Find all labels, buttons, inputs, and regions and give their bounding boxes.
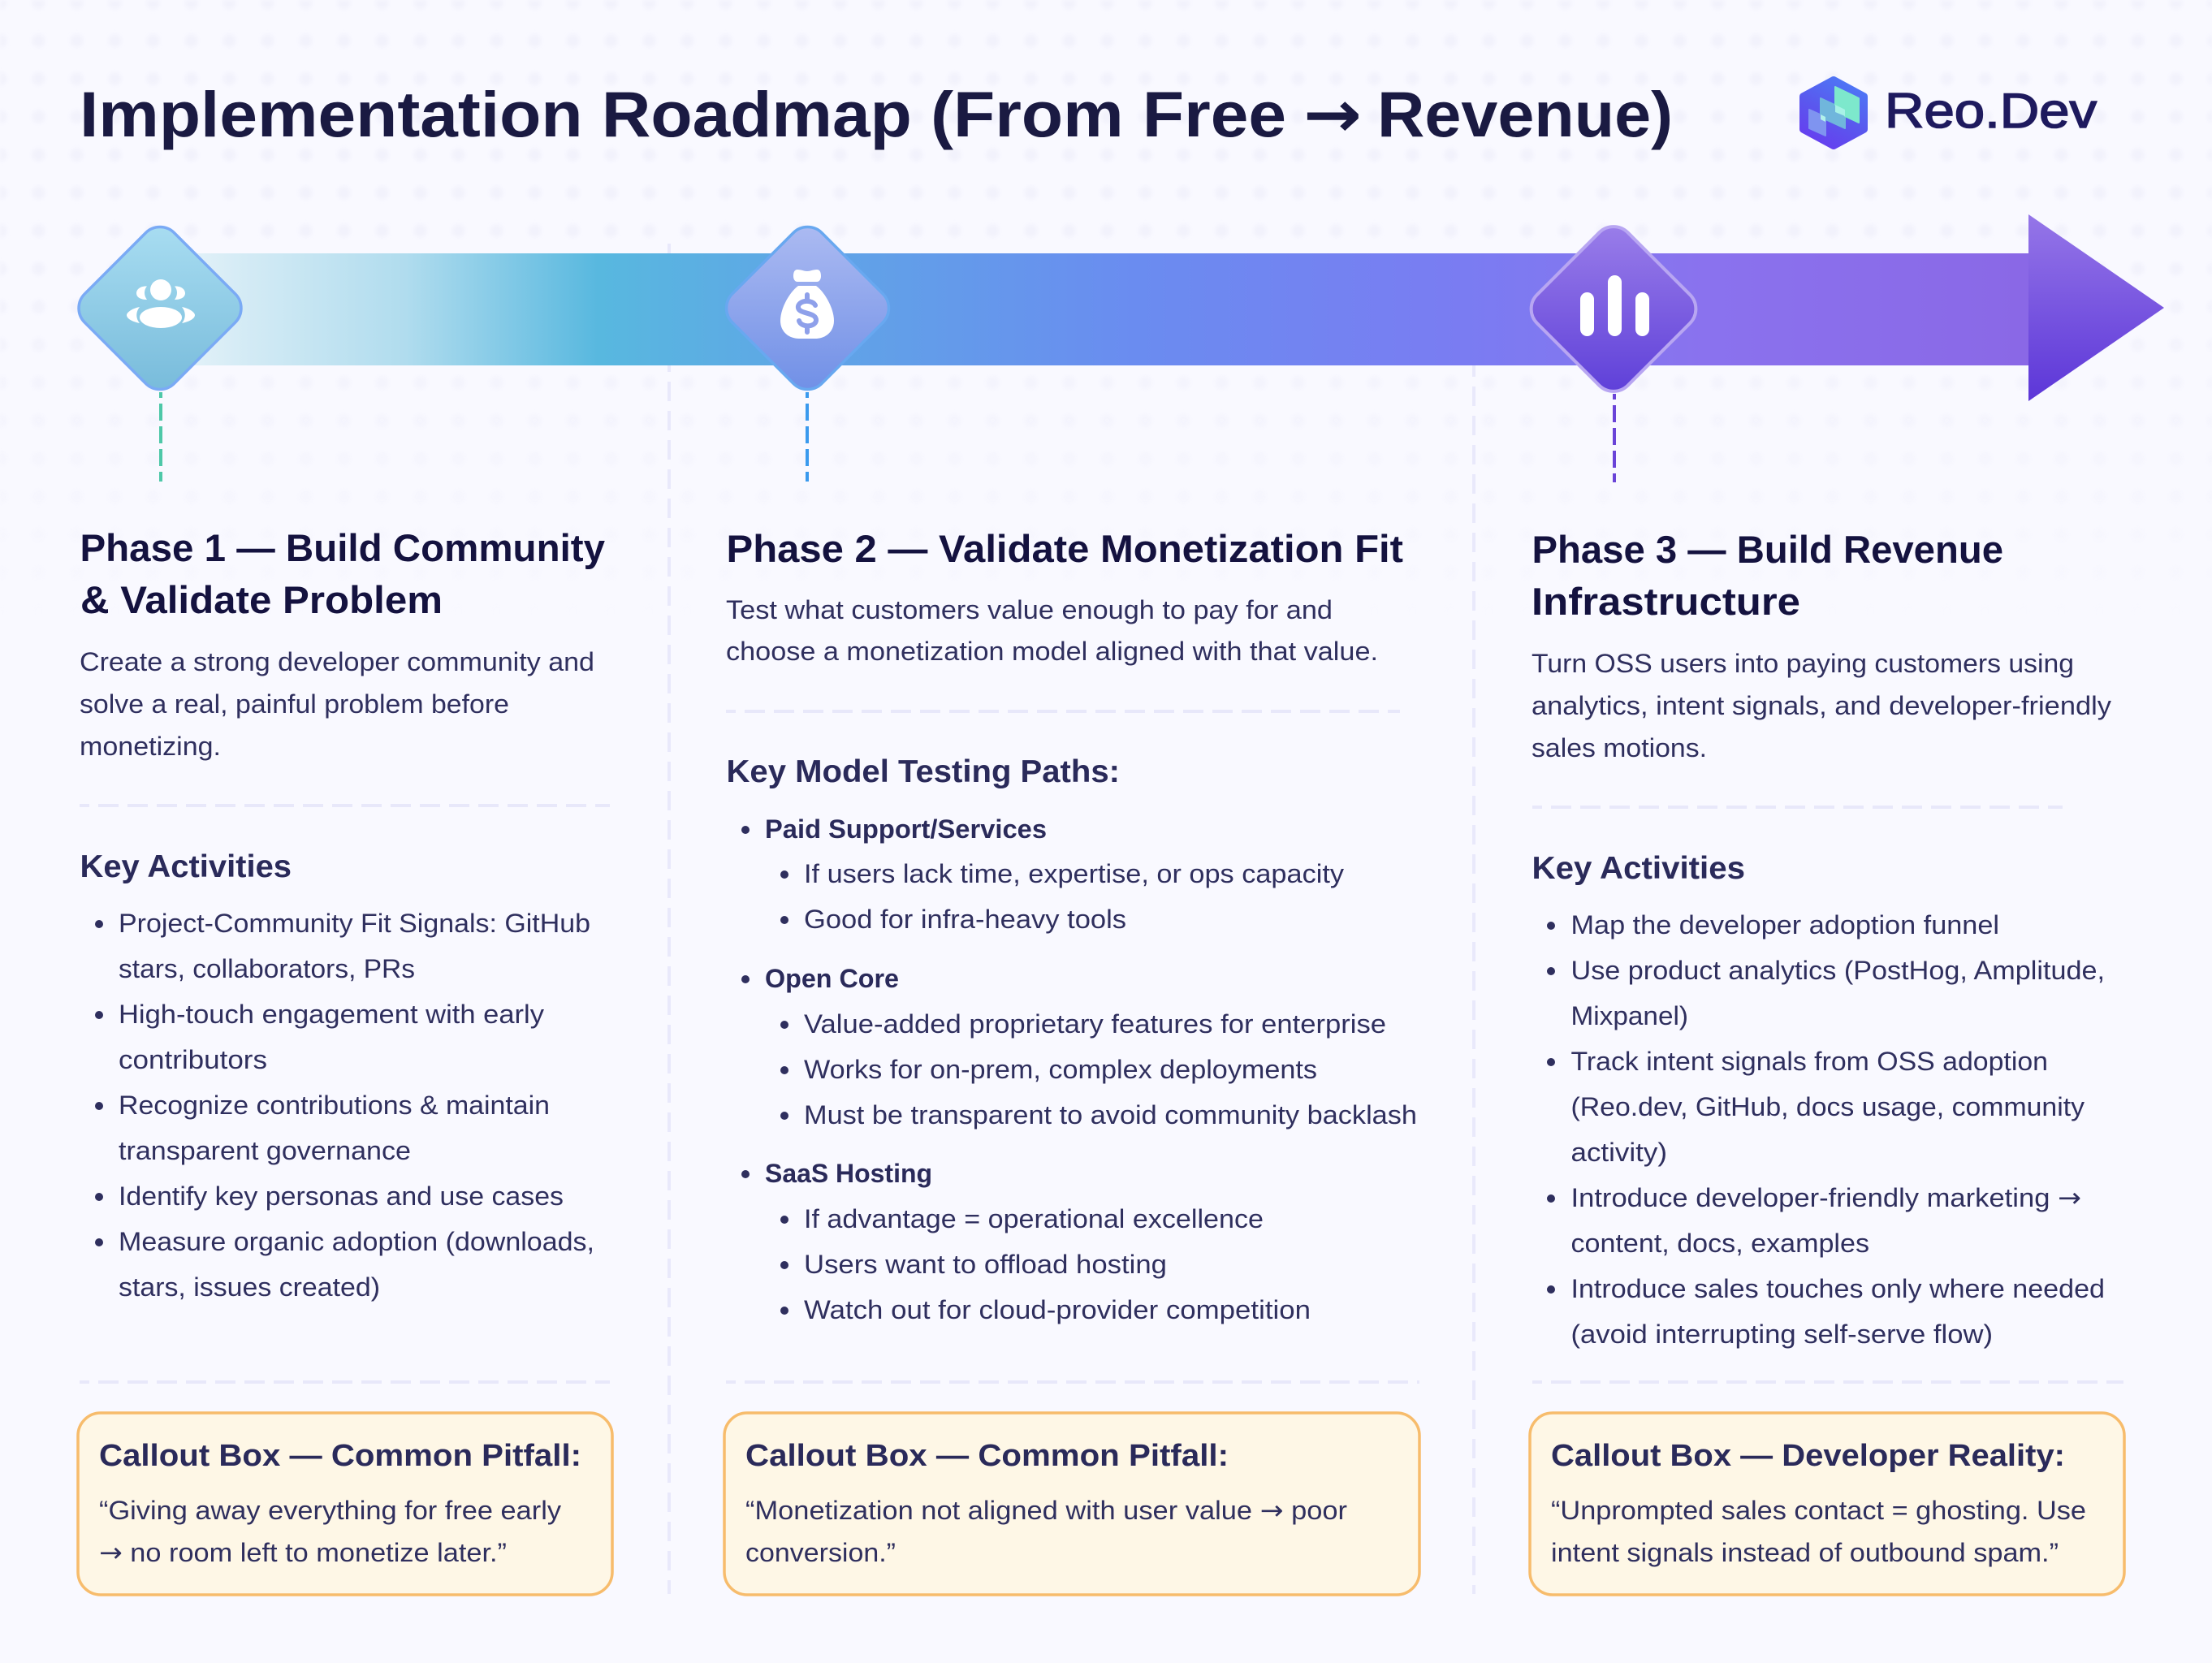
list: key activities: Track intent signals from OSS adoption: [1570, 1047, 2048, 1076]
list: model testing paths: Value-added proprietary features for enterprise: [804, 1009, 1386, 1039]
list: key activities: Recognize contributions & maintain: [119, 1091, 550, 1120]
list: key activities: Identify key personas and use cases: [119, 1181, 564, 1211]
list: model testing paths: Must be transparent to avoid community backlash: [804, 1100, 1417, 1130]
text: phase 2 description: [726, 595, 1378, 666]
text: phase 2 description: Test what customers value enough to pay for and: [726, 595, 1333, 624]
callout: developer reality: “Unprompted sales contact = ghosting. Use: [1551, 1496, 2086, 1525]
callout: developer reality: Callout Box — Developer Reality:: [1551, 1439, 2065, 1473]
list: model testing paths: Watch out for cloud-provider competition: [804, 1295, 1311, 1324]
text: phase 3 description: analytics, intent signals, and developer-friendly: [1532, 691, 2112, 720]
callout: common pitfall 1: [78, 1413, 612, 1595]
panel: phase 1: [78, 526, 612, 1595]
list: key activities: Introduce developer-friendly marketing →: [1570, 1182, 2081, 1213]
list: key activities: (avoid interrupting self-serve flow): [1570, 1320, 1993, 1349]
heading: key activities: Key Activities: [80, 849, 292, 884]
list: key activities: [1547, 910, 2105, 1349]
icon: hexagon mark: [1804, 80, 1864, 145]
list: key activities: Mixpanel): [1570, 1001, 1688, 1030]
callout: common pitfall 1: “Giving away everything for free early: [99, 1496, 562, 1525]
logo: Reo.Dev: Reo.Dev: [1885, 84, 2097, 138]
title: [80, 77, 1673, 152]
list: model testing paths: If users lack time, expertise, or ops capacity: [804, 859, 1345, 888]
heading: phase 3: Phase 3 — Build Revenue: [1532, 528, 2003, 571]
text: phase 1 description: monetizing.: [80, 732, 221, 761]
callout: common pitfall 2: “Monetization not aligned with user value → poor: [745, 1495, 1347, 1526]
list: key activities: Measure organic adoption (downloads,: [119, 1227, 594, 1256]
text: phase 3 description: Turn OSS users into paying customers using: [1532, 649, 2074, 678]
list: model testing paths: If advantage = operational excellence: [804, 1204, 1264, 1233]
callout: common pitfall 1: Callout Box — Common Pitfall:: [99, 1439, 581, 1473]
title: →: [1303, 77, 1362, 152]
heading: phase 1: Phase 1 — Build Community: [80, 526, 605, 569]
list: key activities: contributors: [119, 1045, 267, 1074]
list: key activities: Project-Community Fit Signals: GitHub: [119, 909, 590, 938]
panel: phase 2: [724, 527, 1419, 1595]
list: key activities: Map the developer adoption funnel: [1570, 910, 1999, 939]
list: model testing paths: Open Core: [765, 964, 899, 993]
text: phase 1 description: [80, 647, 594, 761]
heading: key model testing paths: Key Model Testing Paths:: [726, 754, 1120, 789]
callout: developer reality: intent signals instead of outbound spam.”: [1551, 1538, 2059, 1567]
list: key activities: activity): [1570, 1138, 1667, 1167]
list: key activities: [95, 909, 594, 1302]
heading: phase 2: Phase 2 — Validate Monetization Fit: [726, 527, 1403, 570]
heading: phase 3: [1532, 528, 2003, 623]
heading: key activities: Key Activities: [1532, 851, 1745, 886]
heading: phase 3: Infrastructure: [1532, 580, 1800, 623]
callout: common pitfall 2: [724, 1413, 1419, 1595]
text: phase 1 description: solve a real, painful problem before: [80, 689, 509, 719]
list: key activities: stars, issues created): [119, 1272, 380, 1302]
panel: phase 3: [1530, 528, 2124, 1595]
text: phase 3 description: [1532, 649, 2112, 762]
heading: phase 1: [80, 526, 605, 621]
callout: common pitfall 1: → no room left to monetize later.”: [99, 1537, 507, 1568]
title: Implementation Roadmap (From Free: [80, 78, 1286, 150]
text: phase 1 description: Create a strong developer community and: [80, 647, 594, 676]
logo: Reo.Dev: [1804, 80, 2097, 145]
list: model testing paths: [741, 814, 1417, 1324]
list: key activities: Introduce sales touches only where needed: [1570, 1274, 2105, 1303]
arrow: roadmap timeline: [146, 214, 2164, 401]
list: key activities: transparent governance: [119, 1136, 411, 1165]
text: phase 3 description: sales motions.: [1532, 733, 1707, 762]
list: model testing paths: Users want to offload hosting: [804, 1250, 1167, 1279]
callout: common pitfall 2: Callout Box — Common Pitfall:: [745, 1439, 1229, 1473]
callout: common pitfall 2: conversion.”: [745, 1538, 896, 1567]
list: model testing paths: SaaS Hosting: [765, 1159, 932, 1188]
icon: phase 3 bar chart diamond: [1523, 218, 1704, 400]
list: model testing paths: Paid Support/Services: [765, 814, 1047, 844]
title: Revenue): [1377, 78, 1673, 150]
text: phase 2 description: choose a monetization model aligned with that value.: [726, 637, 1378, 666]
heading: phase 1: & Validate Problem: [80, 578, 443, 621]
icon: phase 1 community diamond: [71, 218, 249, 398]
list: key activities: stars, collaborators, PRs: [119, 954, 415, 983]
list: model testing paths: Works for on-prem, complex deployments: [804, 1055, 1317, 1084]
list: key activities: High-touch engagement with early: [119, 1000, 545, 1029]
list: key activities: content, docs, examples: [1570, 1229, 1869, 1258]
list: key activities: Use product analytics (PostHog, Amplitude,: [1570, 956, 2105, 985]
callout: developer reality: [1530, 1413, 2124, 1595]
list: key activities: (Reo.dev, GitHub, docs usage, community: [1570, 1092, 2085, 1121]
list: model testing paths: Good for infra-heavy tools: [804, 905, 1126, 934]
icon: phase 2 money bag diamond: [718, 218, 897, 398]
